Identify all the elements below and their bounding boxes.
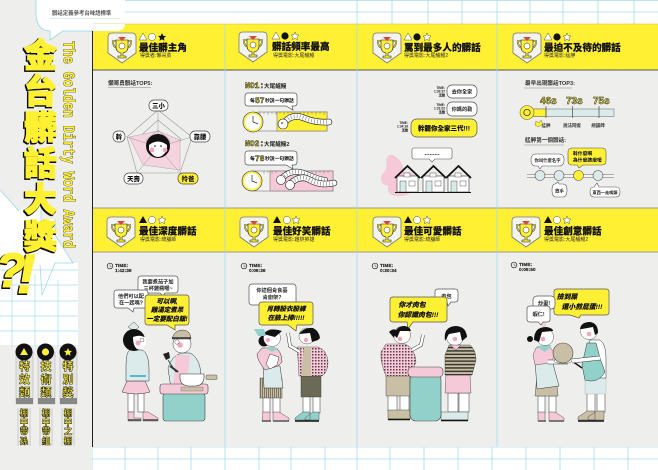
time stamp: cutest: TIME: xyxy=(380,263,393,269)
character: girl xyxy=(122,322,158,421)
dialogue: deepest: 我要煮茄子加 xyxy=(142,278,174,286)
insult panel: bubbles: 1:31:02 xyxy=(434,106,445,110)
dialogue: deepest: 三杯雞醬喔~ xyxy=(144,284,172,292)
white top tab xyxy=(36,0,125,40)
sub labels: 棚 xyxy=(42,407,51,418)
timeline: earliest swear words: 75s xyxy=(593,96,610,107)
main title: 獎 xyxy=(24,218,57,255)
white burst with grid xyxy=(0,190,78,347)
white top tab: 髒話定義參考台味語標準 xyxy=(52,9,112,17)
dialogue: deepest xyxy=(114,276,189,330)
timeline: earliest swear words: 總舖師 xyxy=(591,122,605,129)
award category: special prize: 別 xyxy=(62,373,74,386)
counter and pot xyxy=(160,374,217,421)
main title: 大 xyxy=(24,181,57,218)
panel header: cutest xyxy=(373,216,462,247)
main title xyxy=(24,37,57,255)
sub labels: 中 xyxy=(42,416,50,427)
panel header: most creative xyxy=(512,216,602,247)
award category: special prize: 特 xyxy=(62,359,74,373)
panel header: highest frequency: 髒話頻率最高 xyxy=(272,41,330,53)
sub labels: 棚 xyxy=(20,407,29,418)
frequency chart: NO2: 每 xyxy=(250,155,255,162)
dialogue: creative: 還小煎屁蛋!!! xyxy=(562,303,603,311)
radar face xyxy=(146,134,170,158)
panel header: most impatient xyxy=(513,33,621,63)
panel header: most impatient: 得獎電影:艋舺 xyxy=(544,52,575,59)
time stamp: deepest: 1:42:38 xyxy=(115,268,132,274)
award category: special effects: 特 xyxy=(19,359,30,373)
dialogue: deepest: 一定要配白飯! xyxy=(146,315,188,323)
dialogue: funniest: 肖轉股衣股褲 xyxy=(266,305,307,313)
sub labels: 棚 xyxy=(64,407,73,418)
panel header: cutest: 得獎電影:總舖師 xyxy=(404,236,440,243)
award category: special effects: 效 xyxy=(19,372,30,386)
dialogue: creative: 撿到屎 xyxy=(557,293,578,301)
insult panel: bubbles: 1:34:16 xyxy=(397,124,408,128)
insult panel: bubbles: 去你全家 xyxy=(452,88,473,96)
eel xyxy=(278,116,329,129)
character: right woman cutest xyxy=(441,326,476,420)
award category: technical: 類 xyxy=(40,385,52,399)
timeline: first swear word xyxy=(524,136,620,197)
award category: technical: 術 xyxy=(40,372,52,386)
panel header: best leading role: 最佳髒主角 xyxy=(139,42,187,54)
frequency chart: NO2: NO2: xyxy=(245,140,264,149)
panel header: highest frequency: 得獎電影:大尾鱸鰻 xyxy=(273,52,314,59)
award category: special effects: 類 xyxy=(19,385,30,399)
timeline: first swear word: 幹什麼啊 xyxy=(573,150,592,157)
frequency chart: NO1 xyxy=(243,82,329,132)
frequency chart: NO1: 秒說一句髒話 xyxy=(265,97,294,104)
panel header: funniest: 得獎電影:雞排英雄 xyxy=(273,236,314,243)
panel header: deepest: 得獎電影:總舖師 xyxy=(140,236,176,243)
frequency chart: NO1: 大尾鱸鰻 xyxy=(264,82,287,90)
panel header: most impatient: 最迫不及待的髒話 xyxy=(544,42,621,54)
dialogue: cutest: 肉包 xyxy=(441,292,452,300)
main title: 台 xyxy=(24,73,57,110)
sub labels: 之 xyxy=(64,425,73,436)
award category: special prize: 獎 xyxy=(62,385,74,399)
english vertical title: The Golden Dirty Word Award xyxy=(58,41,76,248)
panel header: highest frequency xyxy=(239,32,330,62)
sub labels: 組 xyxy=(42,435,51,446)
insult panel: bubbles: 活跳 xyxy=(439,110,446,114)
insult panel: bubbles xyxy=(397,85,477,137)
eels xyxy=(276,172,334,190)
radar labels: 拎爸 xyxy=(182,174,195,183)
character: woman with plate xyxy=(527,323,568,421)
insult panel: houses xyxy=(381,148,471,196)
sub labels: 帶 xyxy=(42,425,51,436)
timeline: earliest swear words xyxy=(520,79,614,129)
timeline: first swear word: 東西一走嗎髒 xyxy=(592,189,618,196)
character: man with apron xyxy=(572,322,606,421)
timeline: earliest swear words: 魔法阿嬤 xyxy=(563,122,581,129)
time stamp: cutest xyxy=(372,263,397,274)
timeline: first swear word: 你叫什麼名字 xyxy=(534,157,561,164)
insult panel: bubbles: TIME: xyxy=(436,86,445,90)
timeline: earliest swear words: 73s xyxy=(566,96,583,107)
panel header: best leading role: 得獎者:懶哥勇 xyxy=(140,52,171,59)
time stamp: funniest: TIME: xyxy=(249,263,262,269)
radar labels: 三小 xyxy=(152,101,165,110)
dialogue: deepest: 在一起嗎? xyxy=(119,298,143,306)
time stamp: cutest: 0:30:34 xyxy=(380,268,397,274)
radar labels xyxy=(113,100,210,184)
award category: technical xyxy=(37,344,55,404)
yellow header bands xyxy=(93,24,658,252)
radar labels: 幹 xyxy=(116,132,123,141)
character: woman pointing xyxy=(288,328,328,421)
dialogue: cutest: 你才肉包 xyxy=(398,301,427,309)
sub labels: 中 xyxy=(20,416,28,427)
panel header: funniest: 最佳好笑髒話 xyxy=(273,226,331,238)
panel header: most creative: 得獎電影:大尾鱸鰻2 xyxy=(544,236,588,243)
exclamation ?!: ! xyxy=(17,242,36,305)
character: chef xyxy=(163,330,201,396)
top tab corner xyxy=(93,24,125,31)
award category: special prize xyxy=(60,344,77,404)
panel header: best leading role xyxy=(108,33,187,63)
main title: 髒 xyxy=(24,109,57,146)
sub labels: 帶 xyxy=(20,425,29,436)
panel header: deepest xyxy=(107,216,197,247)
dialogue: deepest: 可以啊, xyxy=(156,298,178,306)
main title: 話 xyxy=(24,145,57,182)
dialogue: funniest: 肯廚架? xyxy=(263,293,281,301)
radar chart: top 5 swear words xyxy=(108,79,210,184)
dialogue: deepest: 他們可以配 xyxy=(118,292,145,300)
clock xyxy=(242,171,262,191)
character: left woman cutest xyxy=(381,326,423,420)
sub labels: 中 xyxy=(64,416,72,427)
clock xyxy=(243,112,263,132)
insult panel: bubbles: 活跳 xyxy=(439,92,446,98)
dialogue: creative: 炒蛋! xyxy=(538,299,550,307)
dialogue: cutest xyxy=(390,289,458,329)
time stamp: creative: TIME: xyxy=(519,262,532,268)
insult panel: bubbles: 你媽的勒 xyxy=(452,105,472,113)
sub labels: 棚 xyxy=(64,435,73,446)
dialogue: deepest: 雞湯定煮呆 xyxy=(151,306,184,314)
frequency chart: NO1: NO1: xyxy=(245,82,264,91)
timeline: first swear word: 艋舺第一個髒話: xyxy=(525,136,566,144)
radar labels: 天壽 xyxy=(127,174,140,183)
panel header: most people insulted: 得獎電影:大尾鱸鰻2 xyxy=(404,52,448,59)
radar labels: 靠腰 xyxy=(194,132,207,141)
insult panel: bubbles: 幹髒你全家三代!!! xyxy=(418,124,470,132)
frequency chart: NO2: 秒說一句髒話 xyxy=(265,155,294,162)
grid verticals over panel xyxy=(225,24,497,447)
time stamp: funniest xyxy=(241,263,266,274)
column divider xyxy=(92,31,94,447)
panel header: funniest xyxy=(240,216,331,247)
panel header: deepest: 最佳深度髒話 xyxy=(139,226,197,238)
time stamp: creative: 0:08:50 xyxy=(519,267,536,273)
frequency chart: NO1: 57 xyxy=(255,97,265,106)
time stamp: creative xyxy=(511,262,536,273)
panel header: cutest: 最佳可愛髒話 xyxy=(404,226,462,238)
exclamation ?! xyxy=(0,242,36,305)
time stamp: deepest xyxy=(107,263,132,274)
insult panel: houses: ......... xyxy=(424,151,440,157)
dialogue: cutest: 你認識肉包!!! xyxy=(398,311,439,319)
frequency chart: NO2 xyxy=(242,140,334,191)
dialogue: creative xyxy=(527,289,609,325)
insult panel: bubbles: 活跳 xyxy=(402,128,409,132)
dialogue: funniest: 你這個肯食基 xyxy=(256,286,288,294)
plate and pan xyxy=(553,343,582,368)
main title: 金 xyxy=(24,37,57,74)
character: woman with apron xyxy=(254,329,289,421)
left grey column xyxy=(0,0,92,470)
radar chart: top 5 swear words: 懶哥勇髒話TOP5: xyxy=(108,79,152,87)
panel header: most creative: 最佳創意髒話 xyxy=(544,226,602,238)
dialogue: funniest: 在臉上捧!!!!! xyxy=(268,314,305,322)
dialogue: creative: 蝦仁! xyxy=(532,310,545,318)
award category: technical: 技 xyxy=(40,359,52,373)
time stamp: deepest: TIME: xyxy=(115,263,128,269)
sub labels xyxy=(18,407,74,446)
insult panel: bubbles: TIME: xyxy=(399,121,408,125)
timeline: earliest swear words: 最早出現髒話TOP3: xyxy=(525,79,575,87)
barrel xyxy=(408,367,443,421)
frequency chart: NO2: 大尾鱸鰻2 xyxy=(264,140,290,148)
panel header: most people insulted: 罵到最多人的髒話 xyxy=(404,42,481,54)
panel header: most people insulted xyxy=(373,33,481,63)
sub labels: 孫 xyxy=(20,435,29,446)
insult panel: bubbles: TIME: xyxy=(436,103,445,107)
timeline: first swear word: 為什麼這麼嗆 xyxy=(573,156,602,164)
timeline: earliest swear words: 46s xyxy=(540,96,557,107)
insult panel: bubbles: 1:30:37 xyxy=(434,90,445,94)
frequency chart: NO2: 78 xyxy=(255,155,265,164)
frequency chart: NO1: 每 xyxy=(250,97,255,104)
main grey panel xyxy=(92,24,658,447)
timeline: earliest swear words: 艋舺 xyxy=(542,122,551,129)
time stamp: funniest: 0:08:36 xyxy=(249,268,266,274)
timeline: first swear word: 放手 xyxy=(555,188,564,194)
award category: special effects xyxy=(16,344,33,404)
dialogue: funniest xyxy=(249,284,313,331)
